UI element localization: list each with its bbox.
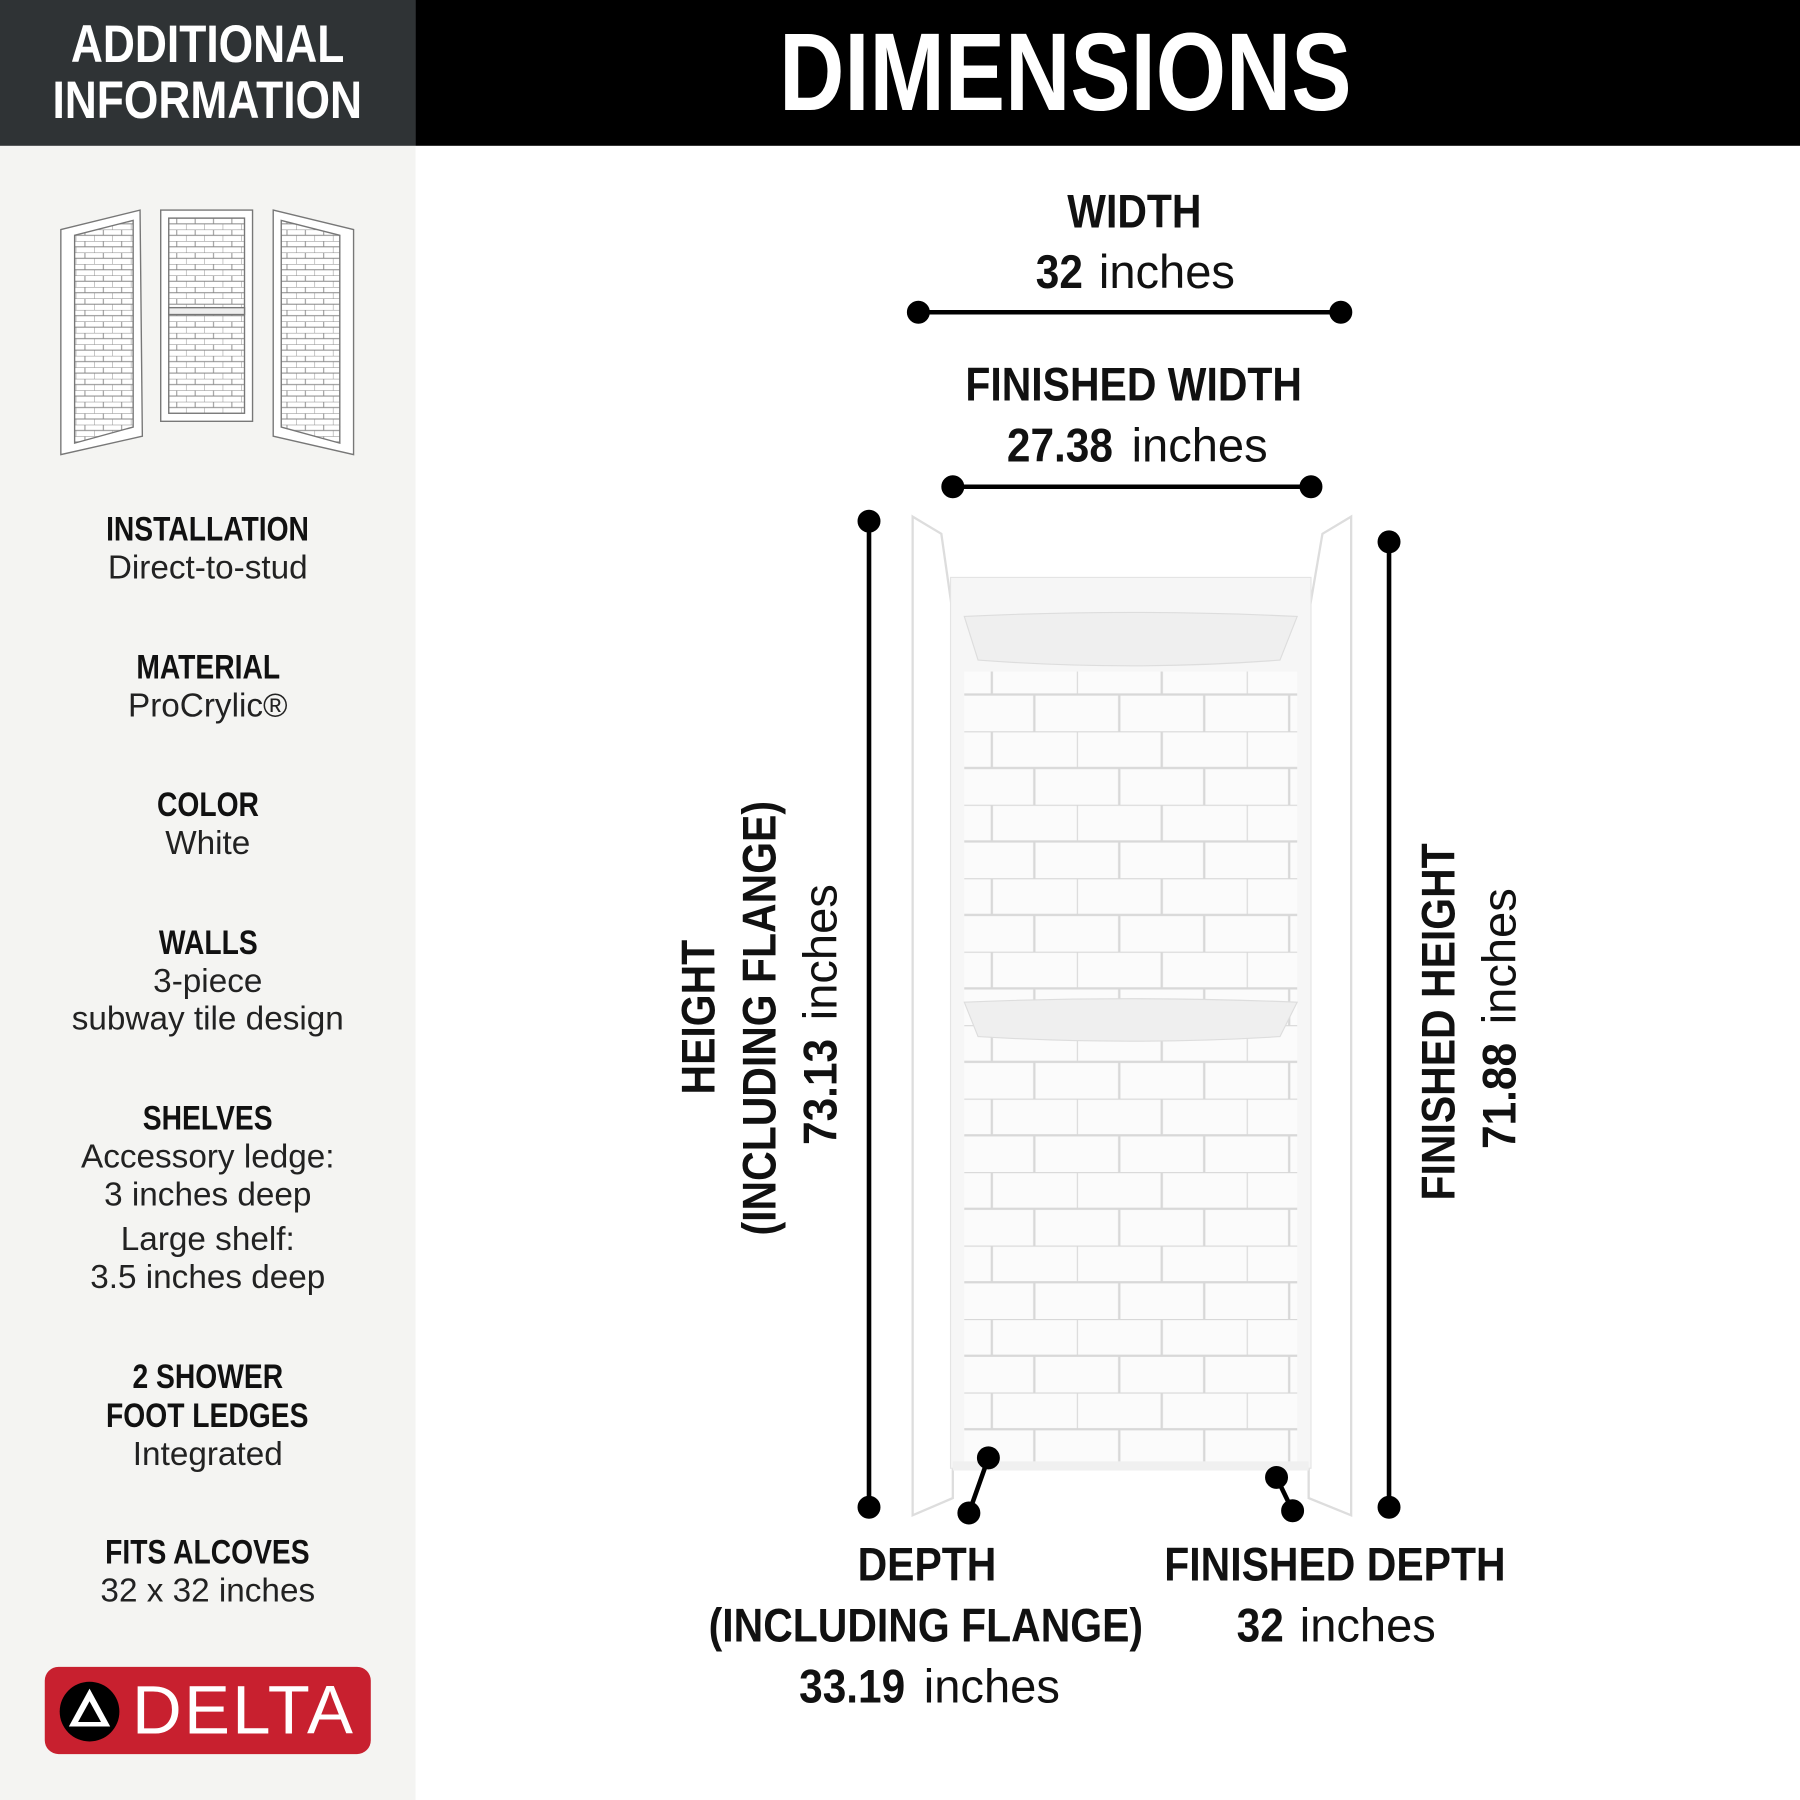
- width label: WIDTH: [1067, 185, 1201, 238]
- info: foot ledges: Integrated: [133, 1436, 283, 1473]
- depth label: [709, 1538, 1144, 1713]
- info: material: [128, 649, 288, 724]
- info: walls: WALLS: [158, 924, 257, 962]
- info: material: ProCrylic®: [128, 688, 288, 724]
- finished height label (rotated): inches: [1473, 888, 1526, 1024]
- left header: [0, 0, 416, 146]
- depth label: (INCLUDING FLANGE): [709, 1599, 1144, 1652]
- left panel background: [0, 0, 416, 1800]
- height label (rotated): inches: [794, 884, 847, 1020]
- info: walls: 3-piece: [153, 963, 262, 1000]
- info: fits alcoves: FITS ALCOVES: [106, 1534, 310, 1572]
- finished depth label: [1164, 1538, 1506, 1652]
- width label: inches: [1099, 246, 1235, 298]
- info: foot ledges: [107, 1358, 309, 1473]
- height label (rotated): (INCLUDING FLANGE): [733, 800, 786, 1235]
- left header: ADDITIONAL: [71, 14, 345, 73]
- info: material: MATERIAL: [136, 649, 280, 686]
- shower illustration: [912, 514, 1352, 1517]
- info: walls: [72, 924, 344, 1038]
- finished depth label: FINISHED DEPTH: [1164, 1538, 1506, 1591]
- info: installation: Direct-to-stud: [108, 550, 308, 587]
- finished width label: 27.38: [1007, 419, 1113, 472]
- info: color: COLOR: [157, 786, 259, 824]
- finished width label: [966, 358, 1303, 472]
- depth label: inches: [924, 1660, 1060, 1713]
- finished height label (rotated): 71.88: [1473, 1043, 1526, 1149]
- finished depth label: 32: [1237, 1599, 1284, 1652]
- logo: Delta: DELTA: [132, 1671, 355, 1748]
- info: installation: INSTALLATION: [106, 511, 309, 549]
- info: shelves: SHELVES: [143, 1100, 273, 1138]
- logo: Delta: [45, 1667, 371, 1754]
- left header: INFORMATION: [53, 70, 363, 130]
- title header: [416, 0, 1800, 146]
- info: shelves: 3.5 inches deep: [90, 1259, 325, 1296]
- info: color: White: [165, 825, 250, 862]
- height label (rotated): 73.13: [794, 1039, 847, 1145]
- finished height label (rotated): FINISHED HEIGHT: [1412, 843, 1465, 1200]
- title header: DIMENSIONS: [779, 11, 1351, 134]
- info: foot ledges: 2 SHOWER: [132, 1358, 283, 1396]
- depth label: DEPTH: [857, 1538, 996, 1591]
- info: color: [157, 786, 259, 862]
- height label (rotated): HEIGHT: [672, 940, 725, 1095]
- icon: three wall panels: [60, 209, 354, 456]
- height label (rotated): [672, 800, 847, 1235]
- info: foot ledges: FOOT LEDGES: [107, 1397, 309, 1435]
- finished width label: inches: [1132, 419, 1268, 472]
- finished height label (rotated): [1412, 843, 1526, 1200]
- info: shelves: 3 inches deep Large shelf:: [104, 1177, 311, 1258]
- info: installation: [106, 511, 309, 587]
- finished depth label: inches: [1300, 1599, 1436, 1652]
- depth label: 33.19: [799, 1660, 905, 1713]
- width label: [1036, 185, 1235, 298]
- info: fits alcoves: 32 x 32 inches: [100, 1573, 315, 1609]
- width label: 32: [1036, 246, 1083, 298]
- info: fits alcoves: [100, 1534, 315, 1609]
- info: walls: subway tile design: [72, 1001, 344, 1038]
- info: shelves: [81, 1100, 335, 1296]
- finished width label: FINISHED WIDTH: [966, 358, 1303, 411]
- info: shelves: Accessory ledge:: [81, 1139, 335, 1176]
